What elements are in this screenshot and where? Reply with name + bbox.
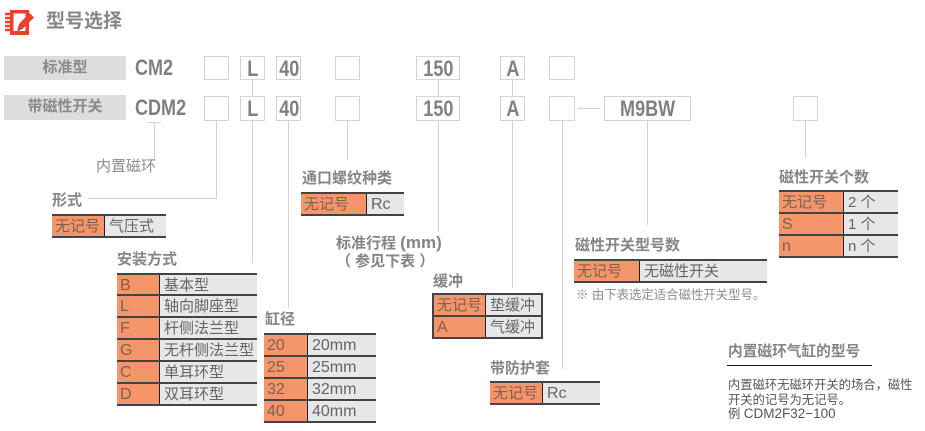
heading: port thread type: 通口螺纹种类 — [302, 170, 392, 187]
table: mounting type: D — [120, 386, 132, 403]
code boxes: standard row: 150 — [423, 56, 453, 81]
table: bore size: 20 — [267, 337, 285, 354]
text block: built-in magnet note: 例 CDM2F32−100 — [728, 406, 836, 421]
text block: built-in magnet note: 内置磁环无磁环开关的场合，磁性 — [728, 378, 912, 392]
note: built-in magnetic ring: 内置磁环 — [96, 158, 156, 175]
table: bore size: 32 — [267, 381, 285, 398]
heading: protective boot: 带防护套 — [490, 360, 550, 377]
table: mounting type: C — [120, 364, 132, 381]
table: mounting type: L — [120, 298, 129, 315]
code boxes: magnetic switch row: M9BW — [620, 96, 675, 121]
table: bore size: 25mm — [312, 359, 356, 376]
table: mounting type: 双耳环型 — [164, 386, 224, 403]
table: bore size: 40 — [267, 403, 285, 420]
table: bore size: 25 — [267, 359, 285, 376]
table: mounting type: 基本型 — [164, 277, 209, 294]
table: mounting type: 轴向脚座型 — [164, 298, 239, 315]
table: bore size: 40mm — [312, 403, 356, 420]
table: number of magnetic switches: 无记号 — [782, 194, 827, 211]
table: port thread type: Rc — [371, 196, 391, 213]
code boxes: magnetic switch row — [204, 96, 818, 121]
code boxes: magnetic switch row: A — [506, 96, 519, 121]
table: protective boot: 无记号 — [493, 385, 538, 402]
table: port thread type: 无记号 — [304, 196, 349, 213]
code boxes: standard row: A — [506, 56, 519, 81]
table: number of magnetic switches: 2 个 — [848, 194, 876, 211]
row label: with magnetic switch — [4, 95, 126, 120]
code boxes: magnetic switch row: 150 — [423, 96, 453, 121]
table: bore size — [264, 333, 376, 423]
table: bore size: 20mm — [312, 337, 356, 354]
row label: standard type — [4, 56, 126, 80]
table: cushion: 无记号 — [437, 297, 482, 314]
icon: notepad and pencil — [5, 10, 34, 35]
table: mounting type — [117, 273, 257, 406]
code boxes: standard row: L — [247, 56, 258, 81]
table: number of magnetic switches: S — [782, 216, 793, 233]
table: cushion: A — [437, 319, 448, 336]
table: port thread type — [301, 192, 404, 216]
model code: CDM2: CDM2 — [135, 95, 186, 120]
heading: bore size: 缸径 — [265, 311, 295, 328]
table: mounting type: B — [120, 277, 131, 294]
table: form: 气压式 — [109, 218, 154, 235]
table: magnetic switch model: 无记号 — [577, 263, 622, 280]
heading: number of magnetic switches: 磁性开关个数 — [779, 169, 869, 186]
row label: standard type: 标准型 — [42, 59, 88, 76]
table: cushion: 垫缓冲 — [490, 297, 535, 314]
heading: standard stroke — [336, 233, 442, 270]
table: mounting type: 无杆侧法兰型 — [164, 342, 254, 359]
table: protective boot — [490, 381, 600, 405]
heading: cushion: 缓冲 — [433, 273, 463, 290]
table: number of magnetic switches: n — [782, 238, 791, 255]
table: bore size: 32mm — [312, 381, 356, 398]
table: number of magnetic switches: 1 个 — [848, 216, 876, 233]
table: protective boot: Rc — [547, 385, 567, 402]
heading: built-in magnet cylinder model — [727, 343, 872, 366]
heading: built-in magnet cylinder model: 内置磁环气缸的型号 — [728, 344, 860, 360]
table: mounting type: F — [120, 320, 130, 337]
code boxes: magnetic switch row: 40 — [279, 96, 299, 121]
table: magnetic switch model — [574, 259, 767, 283]
code boxes: magnetic switch row: L — [247, 96, 258, 121]
heading: form: 形式 — [52, 192, 82, 209]
note: select switch model: ※ 由下表选定适合磁性开关型号。 — [576, 288, 765, 302]
heading: magnetic switch model: 磁性开关型号数 — [575, 237, 680, 254]
code boxes: standard row — [204, 56, 575, 81]
heading: standard stroke: （ 参见下表 ） — [336, 253, 434, 270]
heading: standard stroke: 标准行程 (mm) — [336, 233, 442, 252]
table: number of magnetic switches: n 个 — [848, 238, 876, 255]
code boxes: standard row: 40 — [279, 56, 299, 81]
text block: built-in magnet note — [728, 378, 912, 421]
title: 型号选择 — [46, 11, 122, 32]
row label: with magnetic switch: 带磁性开关 — [27, 98, 102, 115]
table: mounting type: G — [120, 342, 132, 359]
table: form — [52, 214, 166, 238]
table: number of magnetic switches — [779, 190, 898, 258]
table: cushion: 气缓冲 — [490, 319, 535, 336]
table: magnetic switch model: 无磁性开关 — [644, 263, 719, 280]
model code: CM2: CM2 — [135, 55, 173, 80]
table: form: 无记号 — [55, 218, 100, 235]
text block: built-in magnet note: 开关的记号为无记号。 — [728, 392, 851, 406]
heading: mounting type: 安装方式 — [117, 251, 177, 268]
table: cushion — [432, 293, 543, 339]
table: mounting type: 单耳环型 — [164, 364, 224, 381]
table: mounting type: 杆侧法兰型 — [164, 320, 239, 337]
